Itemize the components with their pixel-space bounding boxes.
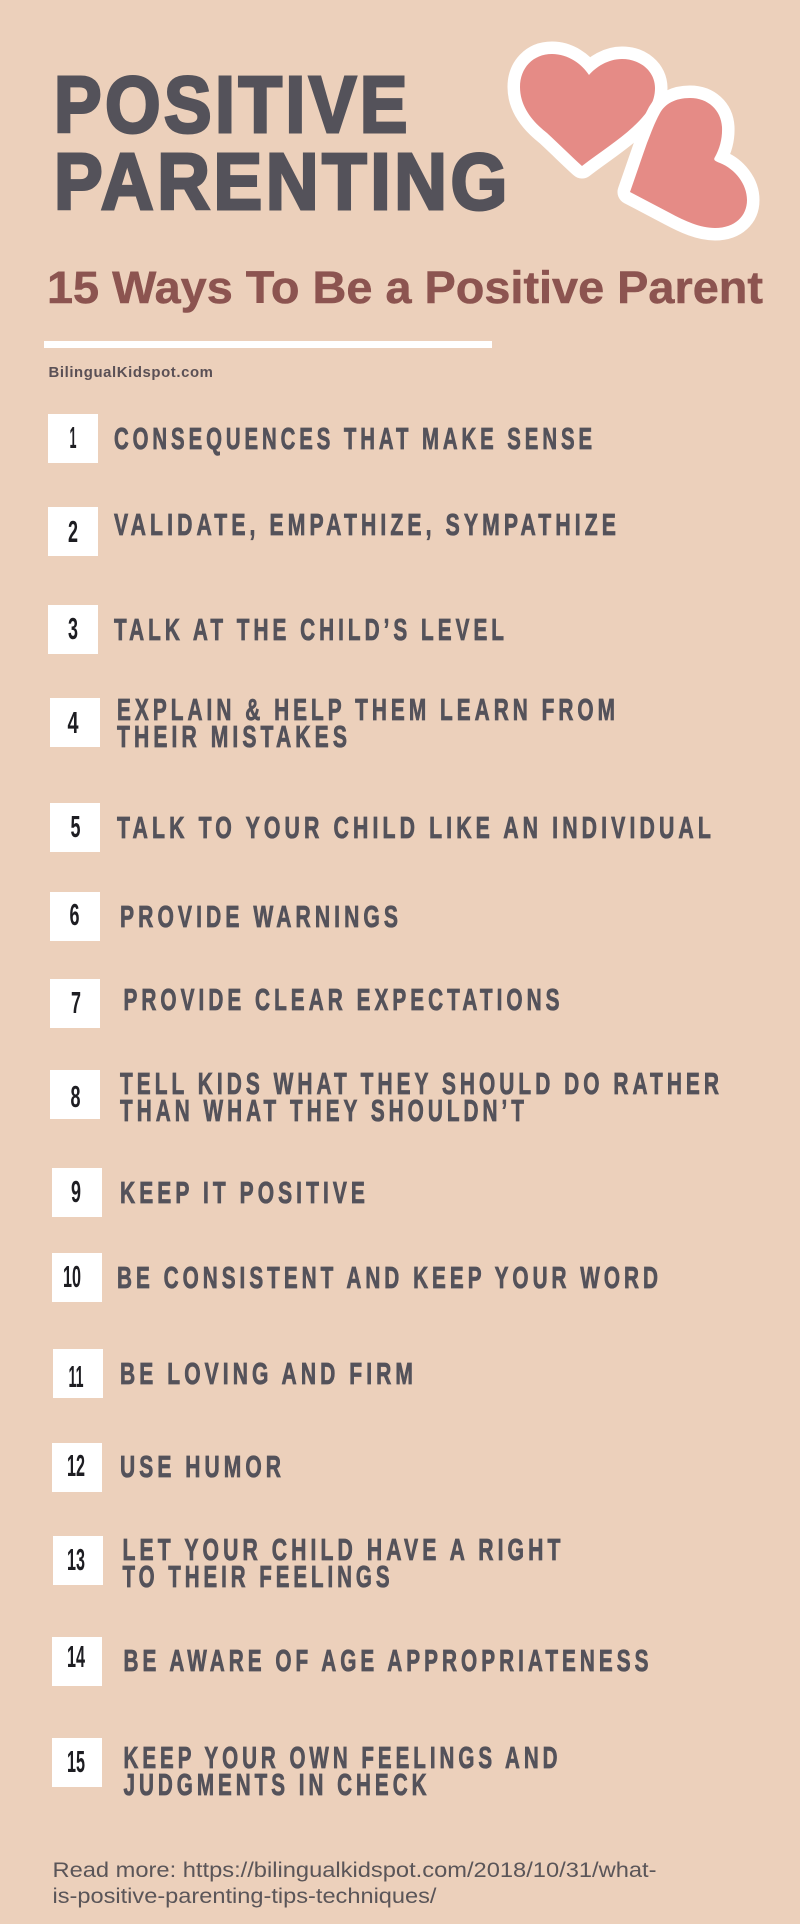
list item 13 (53, 1532, 564, 1594)
number 9: 9 (71, 1174, 81, 1209)
item text 8 (120, 1066, 723, 1128)
list item 1: 1 (70, 420, 76, 455)
number 7: 7 (71, 985, 81, 1020)
item text 4: THEIR MISTAKES (117, 719, 351, 754)
item text 15: JUDGMENTS IN CHECK (124, 1767, 430, 1802)
list item 2 (48, 507, 620, 556)
number box 3 (48, 605, 98, 654)
number 4: 4 (68, 705, 79, 740)
item text 7: PROVIDE CLEAR EXPECTATIONS (124, 982, 564, 1017)
list item 11: 11 (68, 1359, 84, 1394)
white divider bar (44, 341, 492, 348)
number 10: 10 (63, 1259, 81, 1294)
number box 11 (53, 1349, 103, 1398)
item text 11: BE LOVING AND FIRM (120, 1356, 417, 1391)
item text 4 (117, 692, 619, 754)
number box 10 (52, 1253, 102, 1302)
number 12: 12 (67, 1448, 85, 1483)
item text 15: KEEP YOUR OWN FEELINGS AND (124, 1740, 562, 1775)
list item 6 (50, 892, 402, 941)
item text 6: PROVIDE WARNINGS (120, 899, 402, 934)
list item 5 (50, 803, 715, 852)
list item 4 (50, 692, 619, 754)
number 8: 8 (70, 1079, 80, 1114)
icon: two hearts (520, 54, 747, 228)
number box 15 (52, 1738, 102, 1787)
number 13: 13 (67, 1542, 85, 1577)
list item 11 (53, 1349, 417, 1398)
list item 1 (48, 414, 596, 463)
title: POSITIVE (54, 60, 411, 149)
title: PARENTING (54, 137, 511, 226)
footer read-more link text: Read more: https://bilingualkidspot.com/2018/10/31/what- (52, 1858, 656, 1882)
number 2: 2 (68, 514, 78, 549)
item text 13 (122, 1532, 564, 1594)
item text 3: TALK AT THE CHILD’S LEVEL (114, 612, 508, 647)
item text 9: KEEP IT POSITIVE (120, 1175, 369, 1210)
number box 8 (50, 1070, 100, 1119)
list item 3 (48, 605, 508, 654)
number box 13 (53, 1536, 103, 1585)
site name: BilingualKidspot.com (48, 364, 214, 381)
list item 10 (52, 1253, 662, 1302)
list item 15 (52, 1738, 562, 1802)
number 6: 6 (70, 897, 80, 932)
number box 6 (50, 892, 100, 941)
number box 7 (50, 979, 100, 1028)
list item 14 (52, 1637, 652, 1686)
list item 7 (50, 979, 564, 1028)
number box 12 (52, 1443, 102, 1492)
footer read-more link text (52, 1858, 656, 1908)
number 14: 14 (67, 1639, 85, 1674)
number 5: 5 (70, 809, 80, 844)
number box 9 (52, 1168, 102, 1217)
number box 4 (50, 698, 100, 747)
list item 9 (52, 1168, 369, 1217)
item text 13: TO THEIR FEELINGS (122, 1559, 394, 1594)
number 15: 15 (67, 1744, 85, 1779)
number box 1 (48, 414, 98, 463)
list item 8 (50, 1066, 723, 1128)
item text 15 (124, 1740, 562, 1802)
subtitle: 15 Ways To Be a Positive Parent (47, 262, 763, 313)
number box 14 (52, 1637, 102, 1686)
list item 12 (52, 1443, 285, 1492)
footer read-more link text: is-positive-parenting-tips-techniques/ (52, 1884, 437, 1908)
number box 2 (48, 507, 98, 556)
title (54, 60, 511, 226)
number box 5 (50, 803, 100, 852)
number 3: 3 (68, 611, 78, 646)
item text 12: USE HUMOR (120, 1449, 285, 1484)
item text 13: LET YOUR CHILD HAVE A RIGHT (122, 1532, 564, 1567)
item text 8: THAN WHAT THEY SHOULDN’T (120, 1093, 528, 1128)
